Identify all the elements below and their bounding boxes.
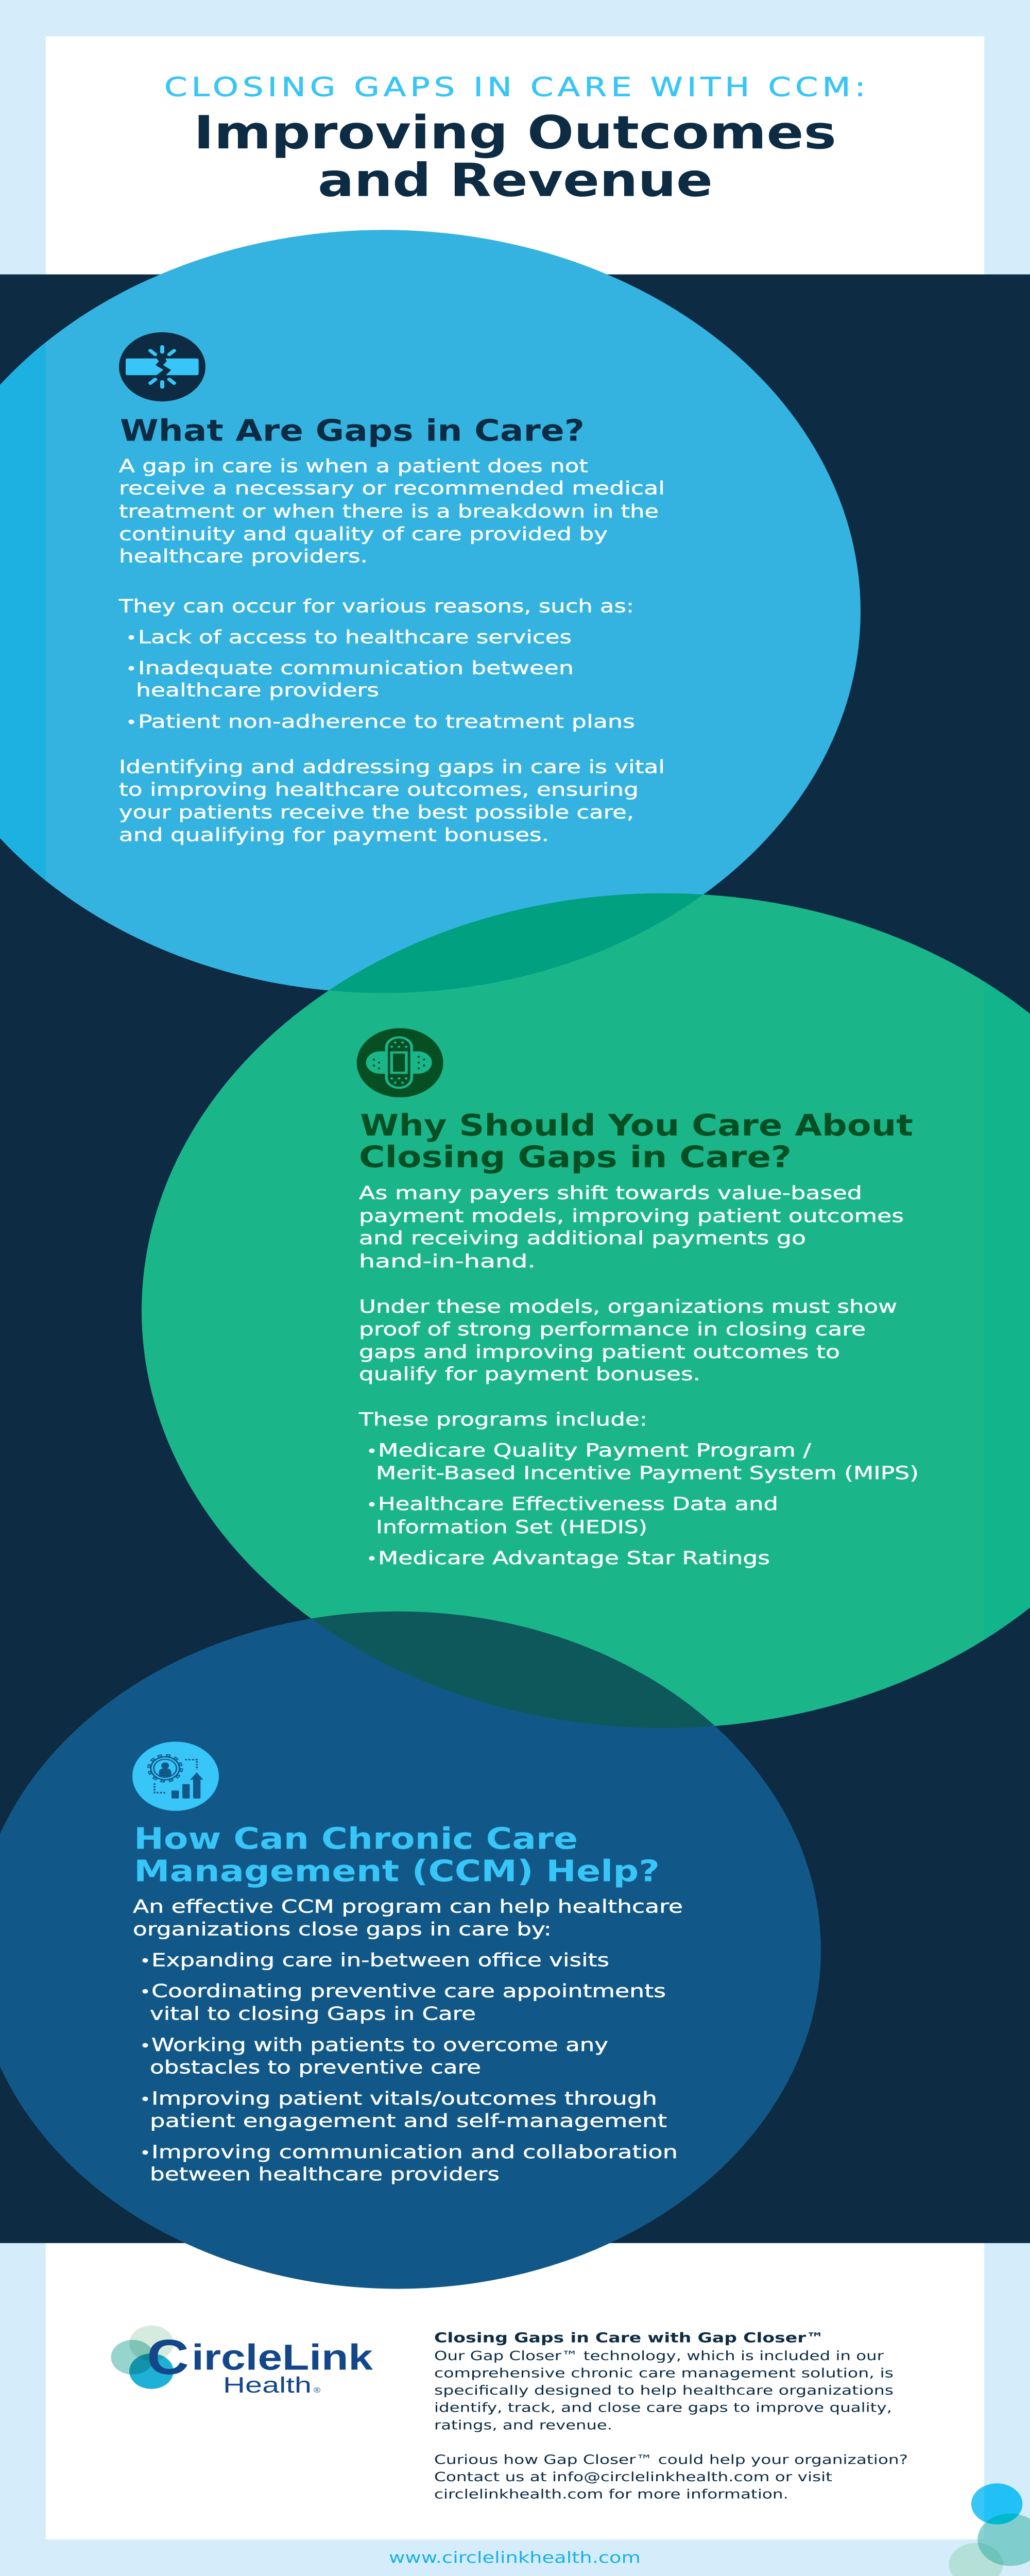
bullet list: CCM benefits: patient engagement and self-management (150, 2110, 667, 2131)
text block: definition (119, 456, 665, 567)
bullet list: programs: Healthcare Effectiveness Data and (378, 1494, 778, 1515)
text block: intro: organizations close gaps in care by: (133, 1919, 552, 1940)
logo wordmark: ® (314, 2386, 320, 2394)
text block: technology: Our Gap Closer™ technology, which is included in our (434, 2349, 884, 2363)
heading (359, 1108, 913, 1174)
text block: definition: healthcare providers. (119, 546, 368, 567)
heading: What Are Gaps in Care? (120, 413, 585, 448)
icon: bandage (357, 1028, 443, 1097)
logo: CircleLink Health (111, 2326, 373, 2398)
text block: definition: receive a necessary or recommended medical (119, 478, 665, 499)
text block: closing paragraph: and qualifying for payment bonuses. (119, 824, 549, 845)
bullet list: CCM benefits: obstacles to preventive care (150, 2057, 481, 2078)
circle: green section background (142, 893, 1030, 1726)
logo wordmark: ircleLink (192, 2336, 373, 2378)
text block: proof of performance: qualify for payment bonuses. (359, 1364, 700, 1385)
heading: Management (CCM) Help? (134, 1854, 660, 1888)
bullet list: CCM benefits: Expanding care in-between office visits (151, 1950, 609, 1971)
heading (134, 1821, 660, 1888)
icon: gear and rising bars (132, 1742, 219, 1811)
website url: www.circlelinkhealth.com (389, 2548, 641, 2567)
text block: value-based models (359, 1182, 904, 1272)
main title (194, 106, 836, 207)
bullet list: CCM benefits: Working with patients to overcome any (151, 2035, 608, 2056)
heading: How Can Chronic Care (134, 1821, 578, 1856)
text block: reasons intro: They can occur for various reasons, such as: (118, 596, 634, 617)
text block: closing paragraph (119, 756, 665, 845)
text block: contact (434, 2452, 908, 2502)
title block (164, 72, 866, 207)
text block: contact: circlelinkhealth.com for more information. (434, 2487, 788, 2502)
logo wordmark: Health (223, 2373, 312, 2398)
text block: definition: continuity and quality of care provided by (119, 523, 608, 545)
bullet list: reasons: healthcare providers (136, 680, 379, 701)
text block: definition: treatment or when there is a breakdown in the (119, 501, 659, 522)
bullet list: CCM benefits: Coordinating preventive care appointments (151, 1980, 666, 2002)
subtitle: CLOSING GAPS IN CARE WITH CCM: (164, 72, 866, 103)
bullet list: programs: Medicare Advantage Star Ratings (378, 1548, 770, 1569)
bullet list: CCM benefits: vital to closing Gaps in Care (150, 2003, 476, 2024)
logo wordmark (147, 2330, 373, 2398)
main title: Improving Outcomes (194, 106, 836, 160)
text block: closing paragraph: your patients receive the best possible care, (119, 802, 634, 823)
main title: and Revenue (318, 154, 713, 207)
text block: technology: specifically designed to help healthcare organizations (434, 2383, 894, 2398)
text block: contact: Contact us at info@circlelinkhealth.com or visit (434, 2470, 832, 2484)
panel: gap closer description (434, 2330, 908, 2502)
text block: value-based models: hand-in-hand. (359, 1251, 536, 1272)
text block: proof of performance: Under these models, organizations must show (359, 1296, 897, 1317)
bullet list: CCM benefits (142, 1950, 678, 2185)
text block: contact: Curious how Gap Closer™ could help your organization? (434, 2452, 908, 2467)
bullet list: CCM benefits: between healthcare providers (150, 2164, 500, 2185)
panel: how can CCM help (132, 1742, 683, 2185)
text block: technology: ratings, and revenue. (434, 2418, 612, 2433)
text block: closing paragraph: Identifying and addressing gaps in care is vital (119, 756, 665, 777)
bullet list: programs: Merit-Based Incentive Payment System (MIPS) (376, 1463, 919, 1484)
panel: why should you care (357, 1028, 919, 1569)
text block: technology: identify, track, and close care gaps to improve quality, (434, 2400, 892, 2415)
text block: closing paragraph: to improving healthcare outcomes, ensuring (119, 779, 639, 800)
bullet list: programs: Information Set (HEDIS) (376, 1517, 647, 1538)
text block: proof of performance: proof of strong performance in closing care (359, 1319, 866, 1340)
icon: broken bar (119, 332, 205, 401)
text block: definition: A gap in care is when a patient does not (119, 456, 588, 477)
text block: value-based models: As many payers shift towards value-based (359, 1182, 862, 1204)
text block: intro (133, 1896, 683, 1940)
panel: what are gaps in care (118, 332, 665, 845)
bullet list: reasons: Lack of access to healthcare services (138, 626, 572, 648)
bullet list: programs (369, 1440, 919, 1569)
text block: technology: comprehensive chronic care management solution, is (434, 2366, 894, 2381)
circle: sky blue section background (0, 230, 861, 1016)
bullet list: reasons (129, 626, 635, 732)
text block: value-based models: payment models, improving patient outcomes (359, 1206, 904, 1227)
icon: overlapping logo circles (111, 2326, 174, 2389)
dark navy band (0, 275, 1030, 2243)
bullet list: CCM benefits: Improving communication and collaboration (151, 2142, 678, 2163)
decorative corner circles (949, 2483, 1030, 2576)
text block: value-based models: and receiving additional payments go (359, 1228, 806, 1249)
circle: deep blue section background (0, 1612, 821, 2289)
text block: programs intro: These programs include: (358, 1409, 647, 1430)
heading: Closing Gaps in Care with Gap Closer™ (434, 2330, 824, 2346)
bullet list: reasons: Inadequate communication between (138, 657, 574, 679)
bullet list: reasons: Patient non-adherence to treatment plans (138, 711, 635, 732)
bullet list: CCM benefits: Improving patient vitals/outcomes through (151, 2088, 657, 2109)
text block: intro: An effective CCM program can help healthcare (133, 1896, 683, 1917)
text block: proof of performance: gaps and improving patient outcomes to (359, 1342, 840, 1363)
text block: proof of performance (359, 1296, 897, 1385)
bullet list: programs: Medicare Quality Payment Program / (378, 1440, 811, 1461)
logo wordmark: C (147, 2330, 189, 2385)
heading: Closing Gaps in Care? (359, 1140, 792, 1174)
text block: technology (434, 2349, 894, 2433)
heading: Why Should You Care About (360, 1108, 913, 1143)
